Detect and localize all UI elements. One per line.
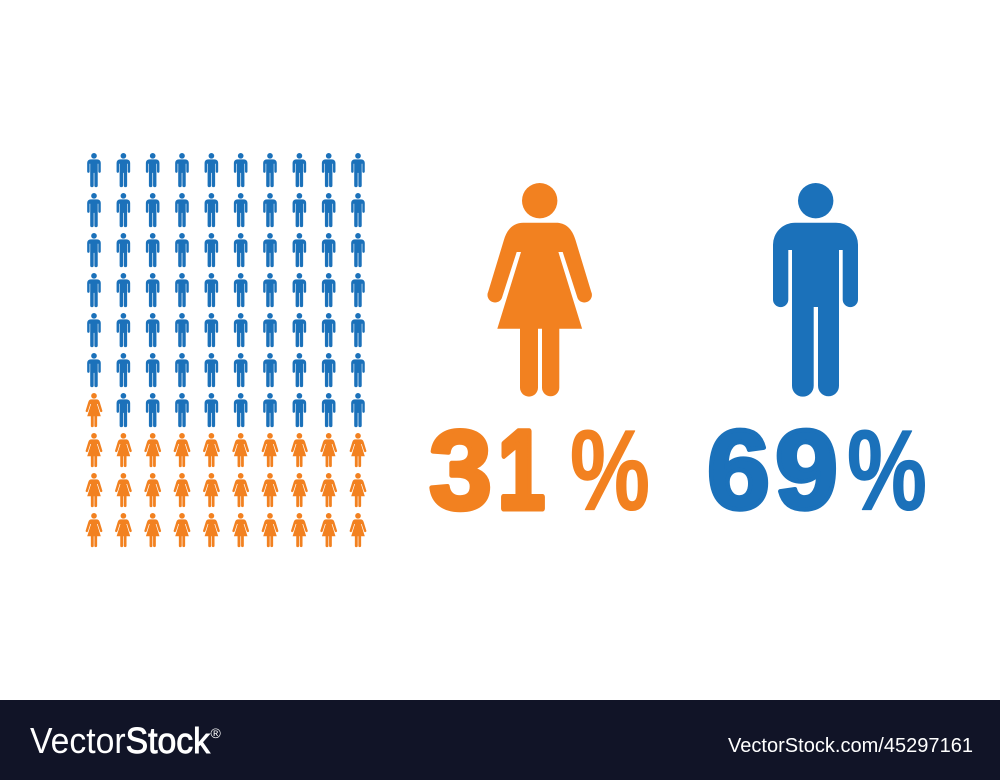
row 1: men [87, 153, 365, 187]
logo: VectorStock: VectorStock [30, 720, 211, 761]
row 10: women [86, 513, 366, 547]
image id: VectorStock.com/45297161 [728, 735, 973, 757]
percentage: 31% women [429, 408, 650, 534]
percentage: 69% men: 9 [775, 408, 838, 532]
row 2: men [87, 193, 365, 227]
row 8: women [86, 433, 366, 467]
row 5: men [87, 313, 365, 347]
row 6: men [87, 353, 365, 387]
percentage: 69% men: 6 [707, 408, 770, 532]
percentage: 69% men [707, 408, 927, 534]
row 7: one woman, nine men [86, 393, 365, 427]
percentage: 31% women: % [570, 408, 650, 534]
footer bar [0, 700, 1000, 780]
icon: large woman [487, 183, 592, 397]
registered mark: ® [210, 725, 222, 741]
percentage: 31% women: 1 [498, 408, 545, 532]
pictogram grid: 100 people, 31 women and 69 men [86, 153, 366, 547]
row 3: men [87, 233, 365, 267]
row 4: men [87, 273, 365, 307]
icon: large man [773, 183, 858, 397]
row 9: women [86, 473, 366, 507]
percentage: 31% women: 3 [429, 408, 492, 532]
percentage: 69% men: % [847, 408, 927, 534]
